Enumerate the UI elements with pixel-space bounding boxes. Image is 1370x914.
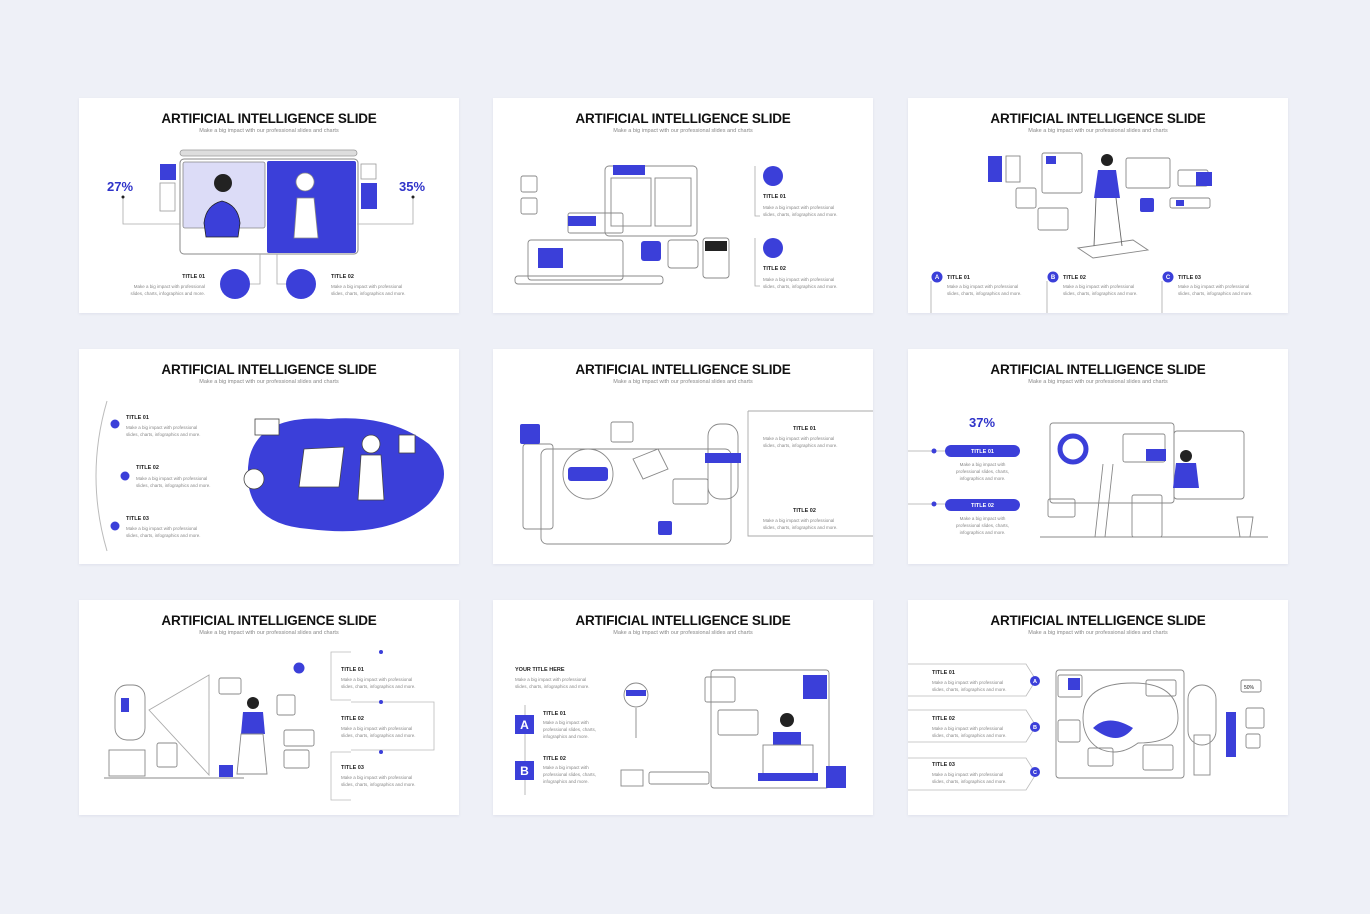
text list: Make a big impact with professional [932,726,1003,731]
text items: TITLE 01 [543,711,566,717]
text list: Make a big impact with professional [341,775,412,780]
text list: slides, charts, infographics and more. [341,782,416,787]
subtitle: Make a big impact with our professional slides and charts [1028,128,1168,134]
text: title 01: slides, charts, infographics and more. [763,212,838,217]
text: title 02 [763,266,838,289]
markers A B C: B [1051,275,1056,281]
illustration [930,152,1253,313]
heading: your title here: slides, charts, infographics and more. [515,684,590,689]
markers A B C: C [1166,275,1171,281]
text list: slides, charts, infographics and more. [932,687,1007,692]
illustration [515,667,846,795]
text list [341,667,416,787]
text items: professional slides, charts, [543,772,596,777]
text: title 01: TITLE 01 [793,426,816,432]
marker B [515,761,534,780]
title: ARTIFICIAL INTELLIGENCE SLIDE [161,613,377,628]
icon 1 [763,166,783,186]
title: ARTIFICIAL INTELLIGENCE SLIDE [575,362,791,377]
text items [543,711,596,784]
title: ARTIFICIAL INTELLIGENCE SLIDE [990,362,1206,377]
text list: Make a big impact with professional [126,425,197,430]
illustration [908,415,1268,538]
title: ARTIFICIAL INTELLIGENCE SLIDE [575,613,791,628]
text list: Make a big impact with professional [932,772,1003,777]
slide 3: woman with data boards [908,98,1288,313]
title: ARTIFICIAL INTELLIGENCE SLIDE [990,613,1206,628]
text list: TITLE 02 [136,465,159,471]
subtitle: Make a big impact with our professional slides and charts [199,379,339,385]
text list: Make a big impact with professional [932,680,1003,685]
text list: slides, charts, infographics and more. [932,779,1007,784]
pill: title 01: Make a big impact with [960,462,1006,467]
stat 37%: 37% [969,415,995,430]
text columns: slides, charts, infographics and more. [1178,291,1253,296]
text columns: Make a big impact with professional [1178,284,1249,289]
text list: TITLE 03 [126,516,149,522]
text list: TITLE 01 [341,667,364,673]
subtitle: Make a big impact with our professional slides and charts [613,128,753,134]
text items: TITLE 02 [543,756,566,762]
text: title 01 [763,194,838,217]
slide 1: AI slide with person and robot [79,98,459,313]
text columns: TITLE 03 [1178,275,1201,281]
marker A [515,715,534,734]
text list: TITLE 01 [932,670,955,676]
icon circles [220,269,316,299]
text: title 01 [763,426,838,448]
text: title 01 [130,274,205,296]
text: title 02 [763,508,838,530]
illustration [104,650,434,800]
slide 8: man at laptop with robot [493,600,873,815]
text: title 02: TITLE 02 [331,274,354,280]
text: title 02: TITLE 02 [763,266,786,272]
pill: title 02: infographics and more. [960,530,1005,535]
illustration: 50% [1244,685,1255,691]
text columns: Make a big impact with professional [947,284,1018,289]
text items: infographics and more. [543,779,589,784]
illustration [908,664,1264,790]
subtitle: Make a big impact with our professional slides and charts [613,379,753,385]
marker A: A [520,718,529,732]
text list: slides, charts, infographics and more. [126,533,201,538]
markers A B C [932,272,1174,282]
markers A B C: C [1033,770,1037,776]
text: title 02 [331,274,406,296]
pill: title 01: professional slides, charts, [956,469,1009,474]
slide 9: brain and robot [908,600,1288,815]
dot [294,662,304,674]
text list: TITLE 02 [932,716,955,722]
text items: infographics and more. [543,734,589,739]
text columns: Make a big impact with professional [1063,284,1134,289]
heading: your title here [515,667,590,689]
text: title 01: TITLE 01 [182,274,205,280]
markers A B C: B [1033,725,1037,731]
text list [126,415,211,538]
text list [932,670,1007,784]
text list: Make a big impact with professional [341,726,412,731]
text: title 02: TITLE 02 [793,508,816,514]
text: title 02: Make a big impact with professional [763,518,834,523]
icon 2 [763,238,783,258]
text: title 02: Make a big impact with professional [763,277,834,282]
slide 7: woman with security icons [79,600,459,815]
title: ARTIFICIAL INTELLIGENCE SLIDE [161,111,377,126]
pill: title 02: TITLE 02 [971,503,994,509]
slide 5: robot machine network [493,349,873,564]
text list: Make a big impact with professional [341,677,412,682]
heading: your title here: YOUR TITLE HERE [515,667,565,673]
text list: TITLE 01 [126,415,149,421]
subtitle: Make a big impact with our professional slides and charts [1028,379,1168,385]
pill: title 02: professional slides, charts, [956,523,1009,528]
slide 4: robot in blue blob [79,349,459,564]
subtitle: Make a big impact with our professional slides and charts [613,630,753,636]
slide 6: robot and man at dashboards [908,349,1288,564]
text: title 01: Make a big impact with professional [134,284,205,289]
stat 27%: 27% [107,179,133,194]
text: title 02: slides, charts, infographics and more. [331,291,406,296]
text items: Make a big impact with [543,720,589,725]
illustration [520,410,873,544]
text columns: TITLE 02 [1063,275,1086,281]
text list: Make a big impact with professional [136,476,207,481]
text list: TITLE 02 [341,716,364,722]
text: title 01: Make a big impact with professional [763,436,834,441]
pill: title 02: Make a big impact with [960,516,1006,521]
stat 35%: 35% [399,179,425,194]
text boxes [331,652,434,800]
text items: professional slides, charts, [543,727,596,732]
text list: TITLE 03 [341,765,364,771]
text columns: TITLE 01 [947,275,970,281]
check markers [110,420,130,530]
text columns: slides, charts, infographics and more. [947,291,1022,296]
text columns [947,275,1253,296]
text: title 01: slides, charts, infographics and more. [130,291,205,296]
text: title 02: slides, charts, infographics and more. [763,284,838,289]
text list: slides, charts, infographics and more. [932,733,1007,738]
markers A B C [1030,676,1040,777]
text list: slides, charts, infographics and more. [341,733,416,738]
pill: title 02 [932,499,1020,535]
illustration: machine [514,165,838,289]
text items: Make a big impact with [543,765,589,770]
pill: title 01 [932,445,1020,481]
text columns: slides, charts, infographics and more. [1063,291,1138,296]
text list: slides, charts, infographics and more. [341,684,416,689]
text: title 02: Make a big impact with professional [331,284,402,289]
subtitle: Make a big impact with our professional slides and charts [199,630,339,636]
text list: slides, charts, infographics and more. [126,432,201,437]
pill: title 01: TITLE 01 [971,449,994,455]
slide 2: AI machine [493,98,873,313]
marker B: B [520,764,529,778]
arrow boxes [908,664,1036,790]
title: ARTIFICIAL INTELLIGENCE SLIDE [990,111,1206,126]
text list: TITLE 03 [932,762,955,768]
text: title 02: slides, charts, infographics and more. [763,525,838,530]
title: ARTIFICIAL INTELLIGENCE SLIDE [575,111,791,126]
text: title 01: slides, charts, infographics and more. [763,443,838,448]
text list: slides, charts, infographics and more. [136,483,211,488]
title: ARTIFICIAL INTELLIGENCE SLIDE [161,362,377,377]
illustration: blob [96,400,444,552]
subtitle: Make a big impact with our professional slides and charts [1028,630,1168,636]
markers A B C: A [935,275,940,281]
illustration: person vs robot screen [107,150,425,299]
pill: title 01: infographics and more. [960,476,1005,481]
heading: your title here: Make a big impact with professional [515,677,586,682]
subtitle: Make a big impact with our professional slides and charts [199,128,339,134]
markers A B C: A [1033,679,1037,685]
text: title 01: Make a big impact with professional [763,205,834,210]
text: title 01: TITLE 01 [763,194,786,200]
text list: Make a big impact with professional [126,526,197,531]
